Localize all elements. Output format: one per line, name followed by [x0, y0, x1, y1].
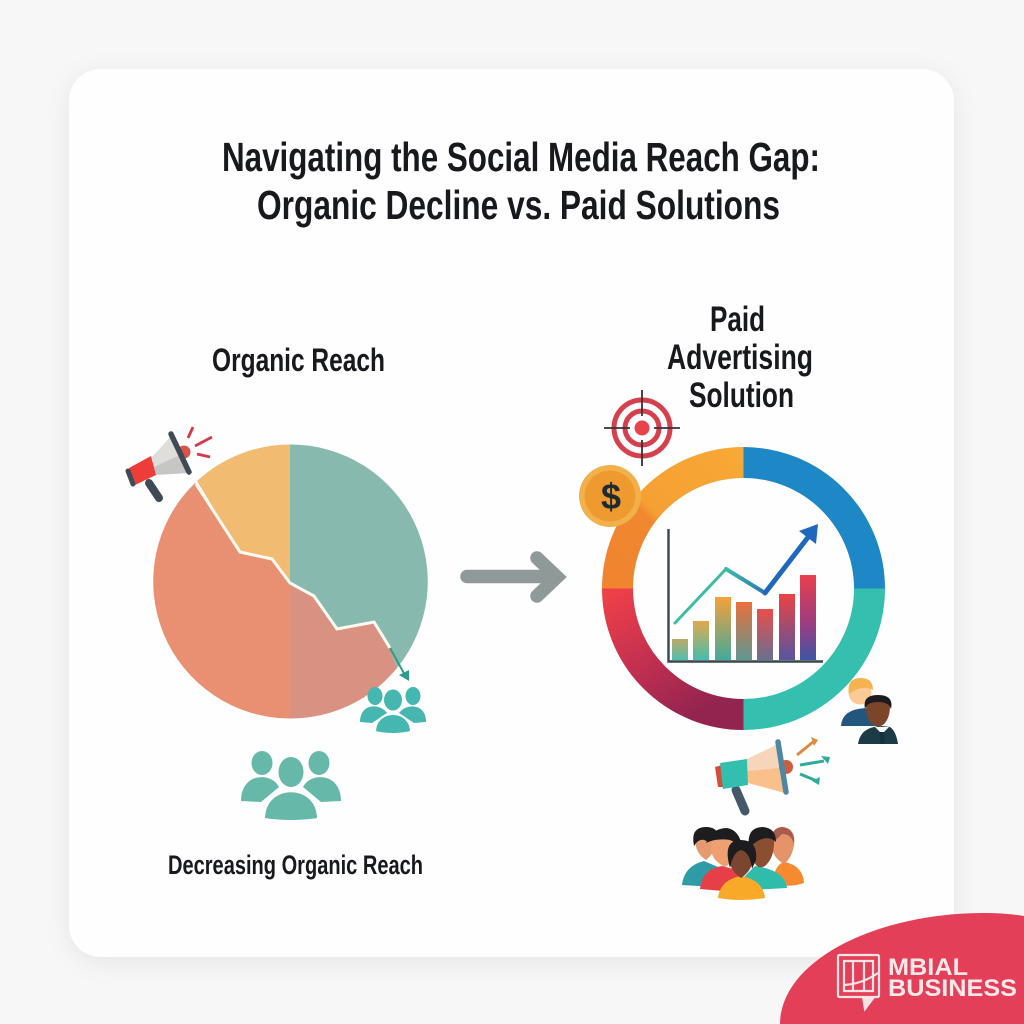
person: front yellow [718, 840, 765, 900]
ring segment: blue [744, 462, 870, 588]
card panel [69, 69, 954, 957]
heading: paid advertising solution [667, 300, 813, 415]
icon: small teal audience [360, 687, 426, 734]
logo wordmark: BUSINESS [888, 975, 1017, 1002]
icon: teal megaphone [715, 737, 830, 811]
decline arrow [390, 648, 409, 681]
icon: red megaphone [128, 427, 212, 498]
icon: target [604, 390, 680, 466]
pie slice: teal [290, 444, 428, 668]
donut ring: paid channels [618, 462, 870, 715]
person: blond [841, 678, 876, 726]
logo wordmark [888, 954, 1017, 1002]
pie slice: amber [197, 444, 290, 583]
person: red shirt [700, 828, 745, 892]
logo badge [780, 913, 1024, 1024]
pie slice: coral [153, 483, 290, 718]
icon: large teal audience [241, 751, 341, 821]
person: dark hair [858, 695, 898, 744]
title: Organic Decline vs. Paid Solutions [257, 182, 780, 228]
heading: paid advertising solution: Solution [689, 376, 794, 415]
decline line [196, 484, 390, 648]
person: back right [771, 827, 804, 886]
heading: paid advertising solution: Paid [710, 300, 765, 339]
heading: organic reach: Organic Reach [212, 342, 385, 378]
pie chart: organic reach [153, 444, 428, 719]
trend line [675, 524, 818, 623]
bars [672, 575, 816, 660]
icon: dollar coin [579, 465, 641, 527]
ring segment: red [618, 588, 744, 714]
title [222, 134, 820, 228]
icon: dollar coin: $ [601, 476, 621, 517]
icon: business people [841, 678, 898, 744]
title: Navigating the Social Media Reach Gap: [222, 134, 820, 180]
caption: decreasing organic reach: Decreasing Organic Reach [168, 850, 423, 880]
person: back left [682, 827, 725, 887]
ring segment: orange [618, 462, 744, 588]
icon: diverse crowd [682, 827, 804, 900]
bar chart with growth arrow [668, 524, 823, 662]
arrow: organic to paid [467, 558, 557, 596]
signal arrows [797, 737, 830, 785]
person: teal shirt [730, 827, 787, 891]
pie slice: muted coral [290, 583, 397, 719]
axes [668, 529, 823, 662]
logo wordmark: MBIAL [888, 954, 968, 981]
logo mark [838, 955, 879, 1009]
heading: paid advertising solution: Advertising [667, 338, 813, 377]
ring segment: teal [744, 588, 870, 715]
